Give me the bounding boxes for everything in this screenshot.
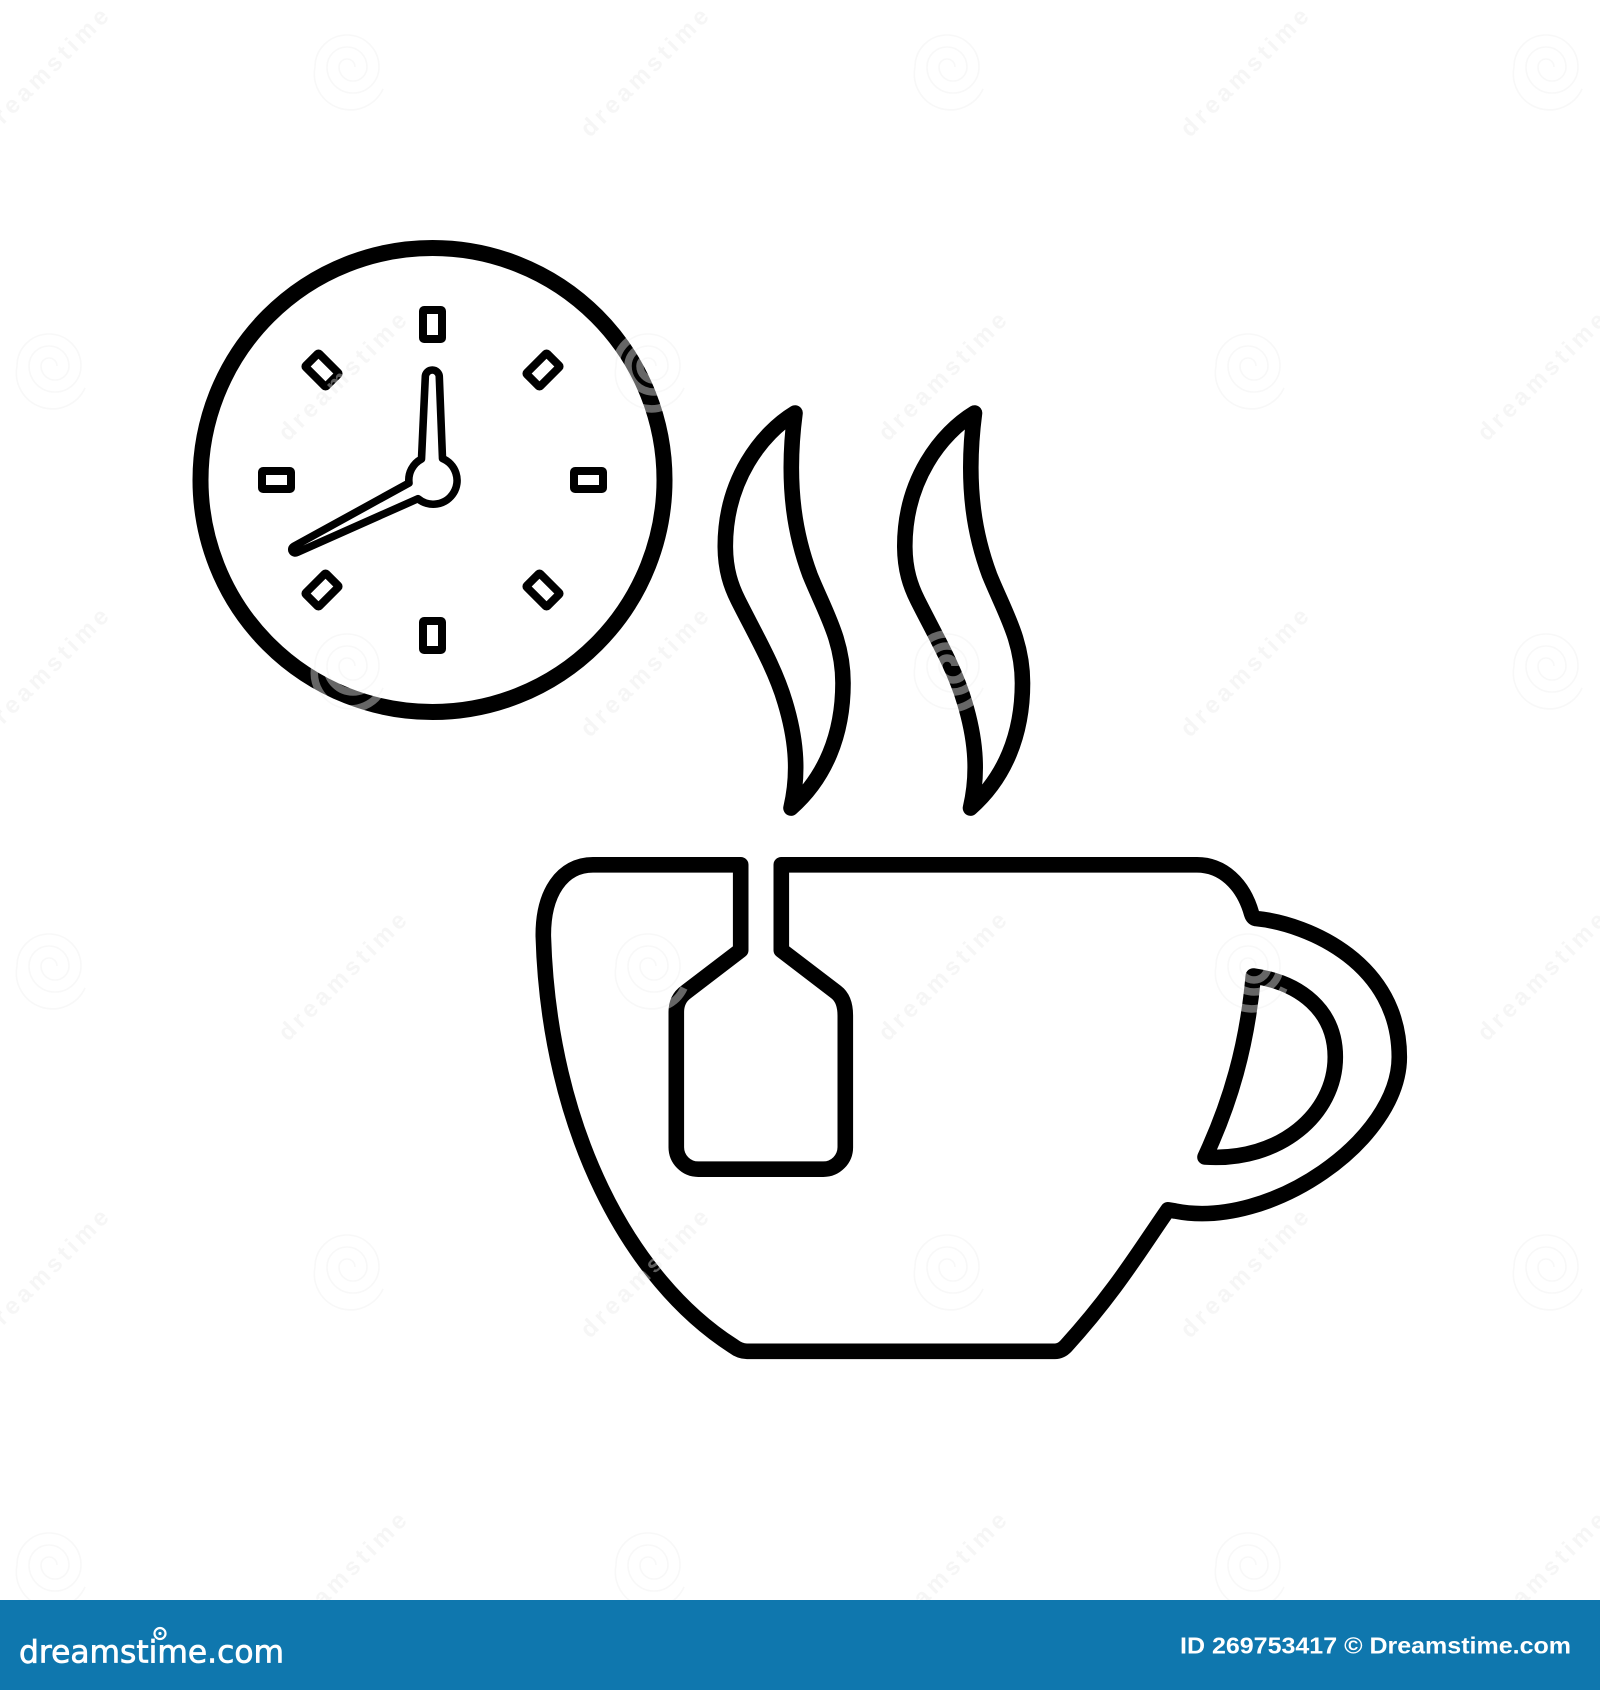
watermark text: dreamstime [273, 307, 412, 446]
cup body, tea bag and handle outline [543, 865, 1399, 1351]
watermark text: dreamstime [575, 603, 714, 742]
footer image id credit: ID 269753417 © Dreamstime.com [1180, 1632, 1571, 1658]
watermark text: dreamstime [1175, 1204, 1314, 1343]
watermark text: dreamstime [273, 1507, 412, 1646]
clock hands [292, 370, 457, 553]
watermark text: dreamstime [575, 3, 714, 142]
watermark text: dreamstime [873, 307, 1012, 446]
icon: steam [725, 413, 1022, 808]
footer band [0, 1600, 1600, 1690]
icon: clock [200, 248, 664, 712]
icon: tea cup with tea bag [543, 865, 1399, 1351]
watermark text: dreamstime [273, 907, 412, 1046]
footer logo: dreamstime.com [19, 1634, 284, 1670]
watermark text: dreamstime [873, 907, 1012, 1046]
steam wisp left [725, 413, 843, 808]
cup handle inner opening [1205, 976, 1335, 1157]
watermark text: dreamstime [873, 1507, 1012, 1646]
watermark text: dreamstime [1175, 3, 1314, 142]
watermark text: dreamstime [1175, 603, 1314, 742]
clock hour ticks [262, 310, 603, 650]
steam wisp right [905, 413, 1022, 808]
clock face ring [200, 248, 664, 712]
watermark text: dreamstime [575, 1204, 714, 1343]
